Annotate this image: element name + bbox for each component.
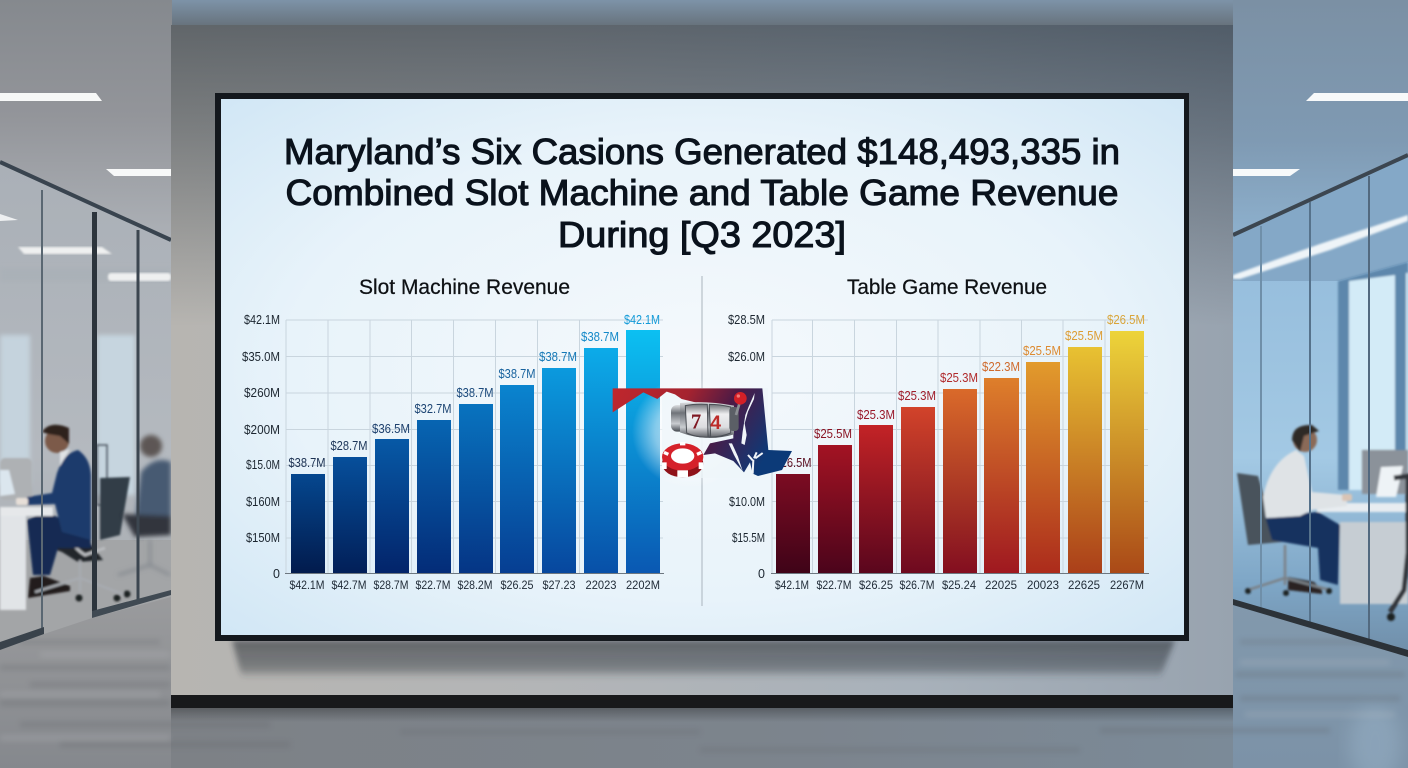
floor <box>0 597 1408 768</box>
title <box>284 131 1120 255</box>
x-axis labels left: $22.7M <box>416 578 450 592</box>
person: blurred second man <box>118 435 171 575</box>
right office behind glass <box>1233 0 1408 660</box>
x-axis labels left <box>290 578 660 592</box>
x-axis labels left: $42.1M <box>290 578 324 592</box>
ceiling lights right <box>1233 93 1408 279</box>
value labels right: $25.3M <box>940 371 978 385</box>
y-axis labels right: $15.5M <box>732 531 765 545</box>
value labels right: $22.3M <box>982 360 1020 374</box>
y-axis labels left: $160M <box>246 495 280 509</box>
chart heading: table game revenue: Table Game Revenue <box>847 276 1047 299</box>
x-axis labels left: $42.7M <box>332 578 366 592</box>
value labels left: $28.7M <box>330 439 368 453</box>
person: man in white sweater <box>1237 425 1408 621</box>
value labels left: $32.7M <box>414 402 452 416</box>
bars right <box>776 331 1144 573</box>
screen frame <box>215 93 1189 641</box>
ceiling <box>0 0 1408 290</box>
value labels left: $42.1M <box>624 313 660 327</box>
value labels right: $26.5M <box>1107 313 1145 327</box>
y-axis labels left: $200M <box>244 423 280 437</box>
icon: maryland state outline <box>613 388 792 476</box>
value labels left <box>288 313 660 470</box>
x-axis labels right: $26.7M <box>900 578 934 592</box>
x-axis labels right: 2267M <box>1110 578 1144 592</box>
chart heading: slot machine revenue: Slot Machine Revenue <box>359 276 570 299</box>
chart: table game revenue <box>728 276 1149 592</box>
glass frame left <box>0 162 171 632</box>
icon: slot machine <box>671 392 747 438</box>
x-axis labels left: 22023 <box>586 578 617 592</box>
x-axis labels left: $28.7M <box>374 578 408 592</box>
icon: maryland map with slot machine and casino chip <box>613 376 792 488</box>
value labels right <box>774 313 1145 470</box>
person: man in navy suit <box>0 425 130 610</box>
y-axis labels left: $35.0M <box>242 350 280 364</box>
wall <box>171 25 1233 695</box>
x-axis labels right: 22025 <box>985 578 1017 592</box>
y-axis labels left: 0 <box>273 567 280 581</box>
y-axis labels left: $15.0M <box>246 458 280 472</box>
gridlines left <box>286 320 663 573</box>
screen panel <box>221 99 1184 635</box>
y-axis labels left <box>242 313 280 581</box>
title: Maryland’s Six Casions Generated $148,493,335 in <box>284 131 1120 172</box>
value labels left: $38.7M <box>539 350 577 364</box>
divider <box>701 276 703 606</box>
x-axis labels left: $26.25 <box>500 578 534 592</box>
glass bottom frames <box>0 590 1408 657</box>
value labels right: $26.5M <box>774 456 812 470</box>
y-axis labels left: $42.1M <box>244 313 280 327</box>
y-axis labels right: $28.5M <box>728 313 765 327</box>
y-axis labels left: $260M <box>244 386 280 400</box>
left office behind glass <box>0 93 171 650</box>
value labels left: $38.7M <box>288 456 326 470</box>
x-axis labels right: 22625 <box>1068 578 1100 592</box>
value labels left: $38.7M <box>581 330 619 344</box>
value labels right: $25.3M <box>898 389 936 403</box>
x-axis labels right: 20023 <box>1027 578 1059 592</box>
x-axis labels right: $25.24 <box>942 578 976 592</box>
chart: slot machine revenue <box>242 276 664 592</box>
x-axis labels right <box>775 578 1144 592</box>
x-axis labels right: $26.25 <box>859 578 893 592</box>
y-axis labels left: $150M <box>246 531 280 545</box>
value labels right: $25.5M <box>814 427 852 441</box>
title: During [Q3 2023] <box>558 214 846 255</box>
y-axis labels right: 0 <box>758 567 765 581</box>
x-axis labels right: $42.1M <box>775 578 809 592</box>
baseboard <box>171 695 1233 708</box>
icon: lever ball <box>734 392 747 405</box>
gridlines right <box>772 320 1148 573</box>
window right <box>1338 262 1408 490</box>
glass frame right <box>1233 155 1408 642</box>
y-axis labels right: $10.0M <box>729 495 765 509</box>
value labels right: $25.5M <box>1023 344 1061 358</box>
value labels right: $25.3M <box>857 408 895 422</box>
value labels right: $25.5M <box>1065 329 1103 343</box>
value labels left: $36.5M <box>372 422 410 436</box>
title: Combined Slot Machine and Table Game Revenue <box>286 172 1118 213</box>
y-axis labels right: $26.0M <box>728 350 765 364</box>
value labels left: $38.7M <box>498 367 536 381</box>
icon: slot machine: 7 <box>691 411 701 433</box>
x-axis labels right: $22.7M <box>816 578 852 592</box>
x-axis labels left: 2202M <box>626 578 660 592</box>
ceiling lights left <box>0 93 171 281</box>
icon: slot machine: 4 <box>710 413 721 434</box>
value labels left: $38.7M <box>456 386 494 400</box>
y-axis labels right <box>728 313 765 581</box>
bars left <box>291 330 660 573</box>
x-axis labels left: $28.2M <box>458 578 492 592</box>
x-axis labels left: $27.23 <box>542 578 576 592</box>
icon: casino chip <box>662 443 703 477</box>
